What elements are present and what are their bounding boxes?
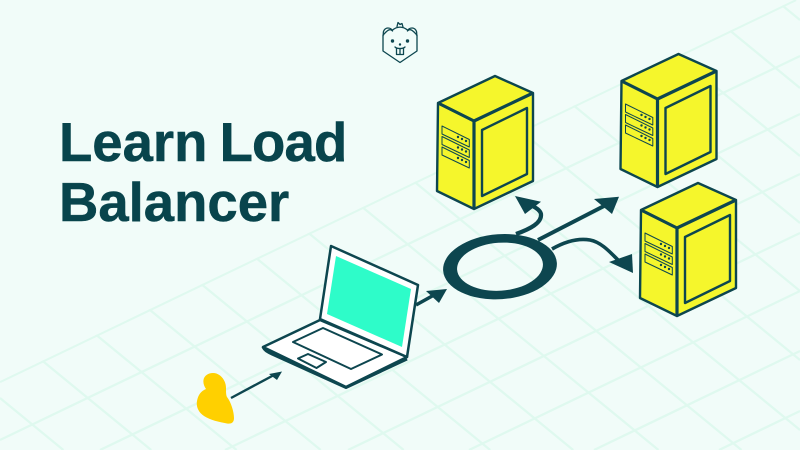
- arrow: laptop to ring: [416, 289, 447, 305]
- icon: laptop: [263, 246, 418, 388]
- server: top right: [620, 54, 716, 187]
- icon: beaver logo: [383, 22, 417, 62]
- title: [59, 112, 347, 233]
- title: Learn Load: [59, 112, 347, 173]
- server: top left: [437, 76, 533, 209]
- arrow: to bottom right server: [552, 239, 633, 273]
- title: Balancer: [59, 172, 289, 233]
- arrow: to top right server: [538, 197, 619, 240]
- icon: user: [197, 373, 234, 424]
- icon: load balancer ring: [441, 230, 559, 303]
- server: bottom right: [640, 183, 736, 316]
- arrow: user to laptop: [231, 372, 282, 398]
- arrow: to top left server: [515, 196, 541, 234]
